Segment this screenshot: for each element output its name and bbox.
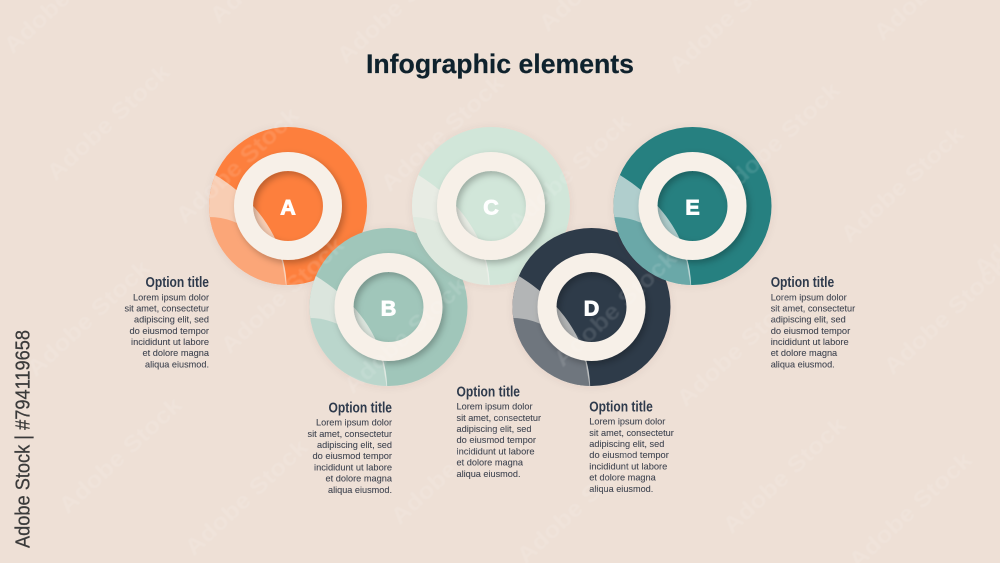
body text E: et dolore magna [771,347,838,358]
letter D: D [584,296,599,320]
watermark pattern: Adobe Stock [338,271,472,398]
body text E: incididunt ut labore [771,336,849,347]
segment base D [512,228,670,386]
side stock id: Adobe Stock | #794119658 [12,330,34,548]
segment base E [614,127,772,285]
ring B [334,253,442,361]
watermark pattern: Adobe Stock [179,433,313,560]
segment light D [512,276,590,386]
donut A [209,127,367,286]
segment base C [412,127,570,285]
option title A: Option title [146,275,209,291]
watermark pattern: Adobe Stock [711,76,845,203]
body text C: et dolore magna [456,457,524,468]
body text A [124,291,210,369]
body text D [589,416,674,494]
body text E: do eiusmod tempor [771,325,850,336]
body text D: et dolore magna [589,472,657,483]
body text D: adipiscing elit, sed [589,438,664,449]
segment light E [614,175,691,285]
segment medium B [310,318,386,386]
body text D: do eiusmod tempor [589,449,669,460]
donut E [614,127,772,286]
segment medium C [413,218,488,284]
body text B: sit amet, consectetur [308,428,392,439]
segment light C [412,175,489,284]
body text E: adipiscing elit, sed [771,314,846,325]
body text D: incididunt ut labore [589,460,667,471]
donut C [412,127,570,286]
segment base A [209,127,367,285]
option title E: Option title [771,275,834,291]
body text A: do eiusmod tempor [130,325,209,336]
letter E: E [685,196,700,220]
body text B: aliqua eiusmod. [328,484,392,495]
body text A: incididunt ut labore [131,336,209,347]
body text B: et dolore magna [326,473,393,484]
body text E: sit amet, consectetur [771,302,855,314]
body text B: adipiscing elit, sed [317,439,392,450]
body text D: Lorem ipsum dolor [589,416,665,427]
body text A: et dolore magna [142,347,210,358]
watermark pattern: Adobe Stock [502,108,636,235]
option title B: Option title [328,400,392,416]
body text C: sit amet, consectetur [456,412,541,423]
ring E [638,152,746,260]
watermark pattern: Adobe Stock [671,284,805,411]
body text D: sit amet, consectetur [589,427,674,438]
body text E: aliqua eiusmod. [771,358,835,369]
body text A: adipiscing elit, sed [134,314,209,325]
segment light B [310,276,387,386]
body text B: Lorem ipsum dolor [316,417,392,428]
body text A: aliqua eiusmod. [145,358,209,369]
watermark pattern: Adobe Stock [170,101,304,228]
text block C [456,384,541,479]
watermark pattern: Adobe Stock [548,244,682,371]
ring A [234,152,342,260]
body text C: Lorem ipsum dolor [456,401,532,412]
donut D [512,228,670,387]
ring D [538,253,646,361]
body text B: do eiusmod tempor [312,450,392,461]
segment base B [310,228,468,386]
body text A: sit amet, consectetur [124,302,209,314]
option title D: Option title [589,399,653,415]
body text C: adipiscing elit, sed [456,423,532,434]
watermark pattern: Adobe Stock [215,231,349,358]
watermark pattern: Adobe Stock [41,58,175,185]
body text C: aliqua eiusmod. [456,468,520,479]
body text A: Lorem ipsum dolor [133,291,209,302]
watermark pattern: Adobe Stock [878,252,1000,379]
letter A: A [280,196,296,220]
watermark pattern: Adobe Stock [375,69,509,196]
segment light A [209,175,286,285]
title: Infographic elements [366,49,634,79]
text block E [771,275,855,369]
text block B [308,400,393,495]
watermark pattern: Adobe Stock [717,411,851,538]
letter B: B [381,296,396,320]
donut B [310,228,468,387]
watermark pattern: Adobe Stock [835,120,969,247]
body text E [771,291,855,369]
segment medium D [513,318,590,386]
segment medium E [614,217,690,285]
watermark pattern: Adobe Stock [385,402,519,529]
text block A [124,275,210,369]
letter C: C [483,196,499,220]
body text B: incididunt ut labore [314,461,392,472]
body text C: incididunt ut labore [456,445,534,456]
ring C [437,152,545,260]
body text B [308,417,393,495]
watermark pattern: Adobe Stock [53,391,187,518]
body text D: aliqua eiusmod. [589,483,653,494]
text block D [589,399,674,494]
body text E: Lorem ipsum dolor [771,291,847,302]
option title C: Option title [456,384,520,400]
watermark pattern: Adobe Stock [21,254,155,381]
body text C [456,401,541,479]
body text C: do eiusmod tempor [456,434,536,445]
segment medium A [210,217,286,285]
